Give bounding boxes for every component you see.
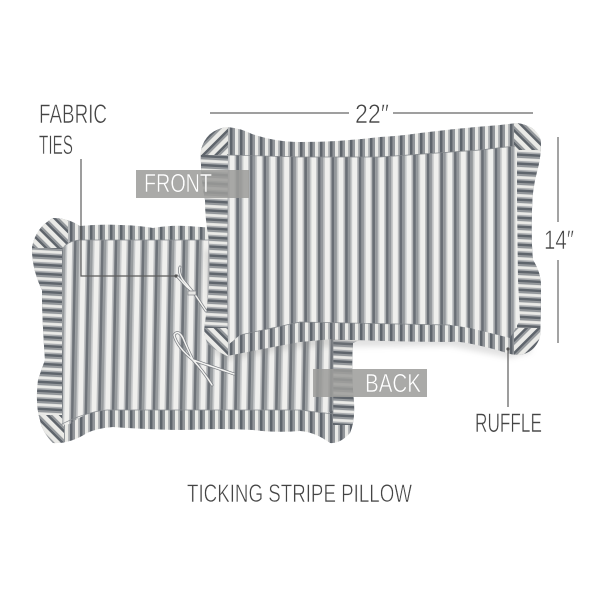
back pillow main panel bbox=[62, 240, 333, 425]
callout: fabric ties: FABRIC bbox=[39, 99, 107, 129]
front pillow top and bottom ruffle bbox=[195, 118, 545, 363]
callout: fabric ties bbox=[39, 99, 178, 278]
front pillow bbox=[195, 118, 547, 363]
back pillow stitched seam bbox=[60, 240, 333, 425]
front pillow right ruffle bbox=[517, 150, 541, 335]
front pillow stitched seam bbox=[228, 146, 515, 335]
front pillow corners bbox=[195, 118, 545, 360]
dimension: width 22 inches: 22″ bbox=[355, 99, 389, 129]
label: FRONT: FRONT bbox=[144, 168, 212, 198]
icon: upper fabric tie bow bbox=[177, 267, 206, 311]
front pillow shadow bbox=[205, 250, 532, 360]
back pillow corners bbox=[32, 218, 68, 444]
front pillow main panel bbox=[227, 146, 520, 345]
callout: ruffle bbox=[475, 347, 542, 438]
back pillow left ruffle bbox=[32, 240, 62, 415]
back pillow right ruffle bbox=[333, 340, 360, 425]
callout: ruffle: RUFFLE bbox=[475, 408, 542, 438]
label: BACK bbox=[313, 368, 427, 398]
dimension: height 14 inches: 14″ bbox=[544, 225, 574, 255]
callout: fabric ties: TIES bbox=[39, 130, 73, 160]
title: TICKING STRIPE PILLOW bbox=[187, 480, 412, 508]
label: BACK: BACK bbox=[365, 368, 422, 398]
front pillow left ruffle bbox=[200, 155, 228, 330]
back pillow top and bottom ruffle bbox=[25, 210, 365, 450]
icon: lower fabric tie bow bbox=[174, 333, 234, 385]
back pillow bbox=[25, 210, 365, 450]
